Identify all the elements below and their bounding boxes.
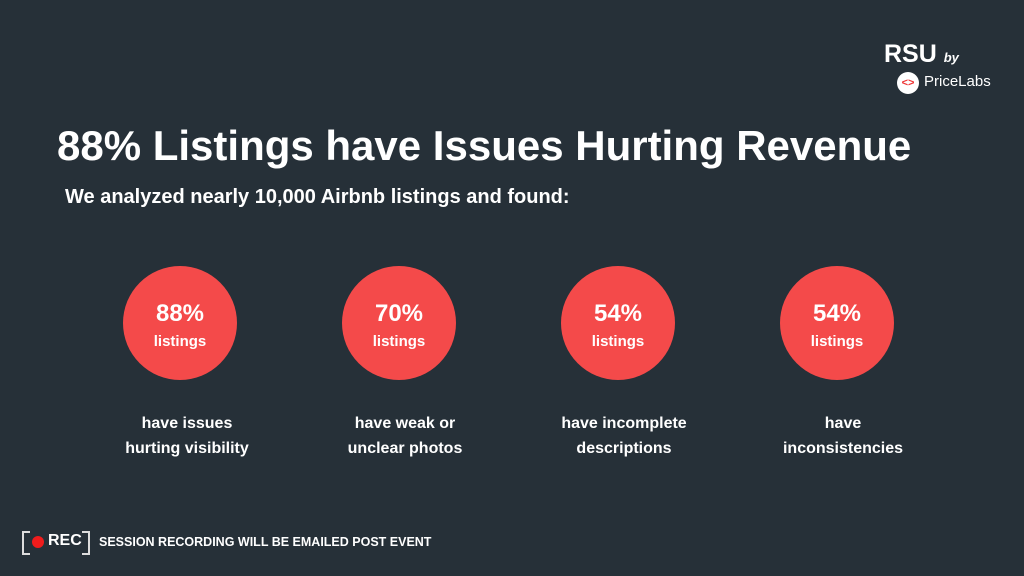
label 2: have weak or xyxy=(355,415,455,432)
label 4: inconsistencies xyxy=(783,440,903,457)
stat 2: listings xyxy=(373,333,425,350)
label 2 xyxy=(348,415,462,457)
label 3: descriptions xyxy=(576,440,672,457)
title: 88% Listings have Issues Hurting Revenue xyxy=(57,122,911,169)
stat 2: 70% xyxy=(375,300,423,327)
label 1 xyxy=(125,415,249,457)
label 2: unclear photos xyxy=(348,440,462,457)
subtitle: We analyzed nearly 10,000 Airbnb listings and found: xyxy=(65,186,570,208)
stat 1: 88% xyxy=(156,300,204,327)
stat 1: listings xyxy=(154,333,206,350)
label 3: have incomplete xyxy=(561,415,687,432)
stat 4: listings xyxy=(811,333,863,350)
label 3 xyxy=(561,415,687,457)
logo: RSU by xyxy=(884,40,959,68)
rec footer: REC xyxy=(48,532,82,549)
stat 4 xyxy=(780,266,894,380)
icon: pricelabs xyxy=(897,72,919,94)
label 4: have xyxy=(825,415,861,432)
logo xyxy=(884,40,991,94)
stat 1 xyxy=(123,266,237,380)
stat 2 xyxy=(342,266,456,380)
rec footer xyxy=(22,531,432,555)
rec footer: SESSION RECORDING WILL BE EMAILED POST EVENT xyxy=(99,535,431,549)
stat 3 xyxy=(561,266,675,380)
stat 3: 54% xyxy=(594,300,642,327)
label 4 xyxy=(783,415,903,457)
label 1: have issues xyxy=(142,415,232,432)
icon: pricelabs: <> xyxy=(902,77,914,89)
stat 3: listings xyxy=(592,333,644,350)
stat 4: 54% xyxy=(813,300,861,327)
logo: PriceLabs xyxy=(924,73,991,90)
label 1: hurting visibility xyxy=(125,440,249,457)
